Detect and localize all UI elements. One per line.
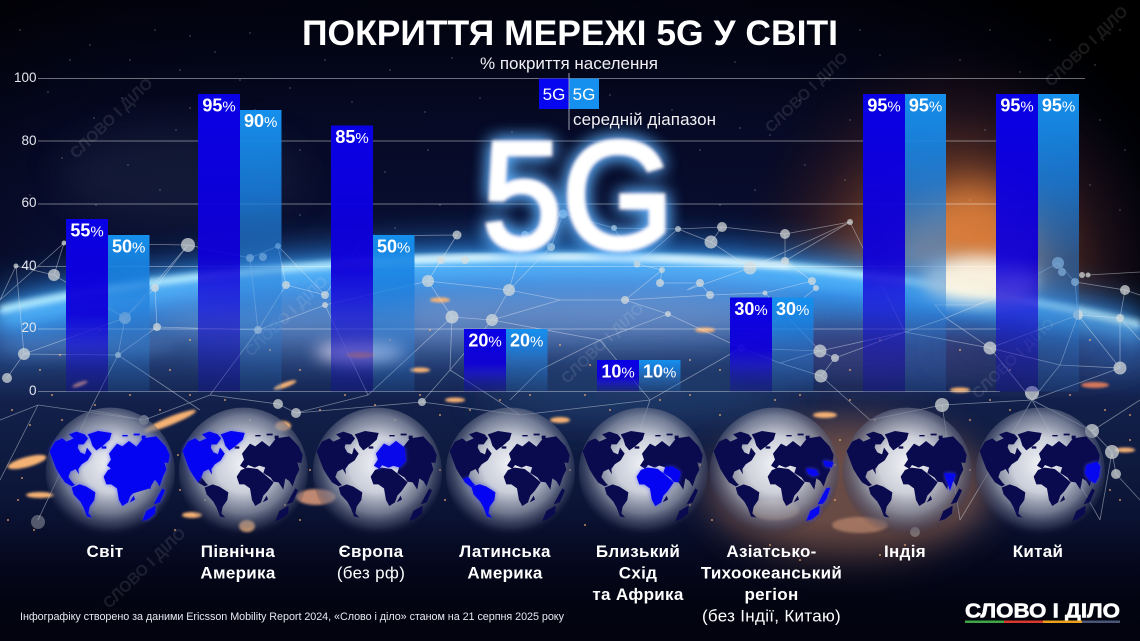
source note: Інфографіку створено за даними Ericsson Mobility Report 2024, «Слово і діло» станом на 21 серпня 2025 року: [20, 611, 565, 623]
bars: Індія: 95%: [867, 96, 901, 116]
globe: Північна Америка: [179, 408, 308, 537]
watermarks: СЛОВО І ДІЛО: [762, 49, 852, 136]
region labels: [87, 542, 1063, 626]
label: Азіатсько-Тихоокеанський регіон: регіон: [744, 585, 799, 604]
label: Близький Схід та Африка: Близький: [596, 542, 680, 561]
globe: Світ: [46, 408, 175, 537]
y axis labels: 100: [14, 70, 36, 85]
watermarks: СЛОВО І ДІЛО: [969, 315, 1059, 402]
label: Європа: (без рф): [337, 564, 405, 582]
globe: Індія: [843, 408, 972, 537]
bars: Азіатсько-Тихоокеанський регіон: [730, 298, 814, 392]
bars: Китай: 95%: [1042, 96, 1075, 116]
bar chart: [66, 94, 1079, 392]
bars: Азіатсько-Тихоокеанський регіон: 30%: [776, 299, 809, 319]
logo: СЛОВО І ДІЛО: [965, 600, 1120, 622]
bars: Європа: [331, 126, 414, 392]
bars: Латинська Америка: 20%: [510, 330, 543, 350]
label: Китай: Китай: [1013, 542, 1063, 561]
legend: 5G: [573, 85, 595, 104]
legend: 5G: [543, 85, 565, 104]
title: ПОКРИТТЯ МЕРЕЖІ 5G У СВІТІ: [302, 13, 838, 53]
background: network mesh: [0, 210, 1140, 537]
bars: Європа: 50%: [377, 236, 410, 256]
bars: Північна Америка: 95%: [202, 96, 236, 116]
bars: Північна Америка: 90%: [244, 111, 277, 131]
legend: середній діапазон: [573, 110, 716, 129]
globe: Китай: [976, 408, 1105, 537]
bars: Латинська Америка: 20%: [468, 330, 502, 350]
bars: Близький Схід та Африка: 10%: [601, 362, 635, 382]
y axis labels: 40: [21, 258, 36, 273]
bars: Індія: [863, 94, 946, 392]
bars: Китай: 95%: [1000, 96, 1034, 116]
watermarks: СЛОВО І ДІЛО: [558, 300, 648, 387]
label: Близький Схід та Африка: та Африка: [592, 585, 684, 604]
label: Близький Схід та Африка: Схід: [619, 564, 657, 582]
label: Латинська Америка: Латинська: [459, 542, 551, 561]
watermarks: СЛОВО І ДІЛО: [242, 273, 332, 360]
bars: Світ: 55%: [70, 220, 104, 240]
watermarks: СЛОВО І ДІЛО: [1042, 3, 1132, 90]
label: Європа: Європа: [339, 542, 403, 561]
globe: Латинська Америка: [446, 408, 575, 537]
label: Північна Америка: Америка: [200, 564, 276, 582]
bars: Індія: 95%: [909, 96, 942, 116]
bars: Близький Схід та Африка: [597, 360, 680, 392]
bars: Близький Схід та Африка: 10%: [643, 362, 676, 382]
bars: Європа: 85%: [335, 127, 369, 147]
bars: Світ: [66, 219, 150, 392]
bars: Азіатсько-Тихоокеанський регіон: 30%: [734, 299, 768, 319]
y axis labels: [14, 70, 36, 398]
bars: Латинська Америка: [464, 329, 548, 392]
label: Світ: Світ: [87, 542, 123, 561]
label: Індія: Індія: [884, 542, 926, 561]
watermarks: СЛОВО І ДІЛО: [67, 75, 157, 162]
y axis labels: 80: [21, 133, 36, 148]
label: Азіатсько-Тихоокеанський регіон: Тихоокеанський: [701, 564, 842, 582]
background: city lights: [6, 298, 1135, 560]
y axis labels: 60: [21, 195, 36, 210]
bars: Північна Америка: [198, 94, 282, 392]
bars: Світ: 50%: [112, 236, 145, 256]
globe: Близький Схід та Африка: [579, 408, 708, 537]
bars: Китай: [996, 94, 1079, 392]
label: Азіатсько-Тихоокеанський регіон: Азіатсько-: [726, 542, 817, 561]
subtitle: % покриття населення: [480, 54, 658, 73]
y axis labels: 20: [21, 320, 36, 335]
globe: Європа: [313, 408, 442, 537]
y axis labels: 0: [29, 383, 36, 398]
chart grid lines: [38, 78, 1085, 392]
globe: Азіатсько-Тихоокеанський регіон: [710, 408, 839, 537]
watermarks: СЛОВО І ДІЛО: [100, 525, 190, 612]
label: Азіатсько-Тихоокеанський регіон: (без Індії, Китаю): [702, 606, 841, 626]
label: Латинська Америка: Америка: [467, 564, 543, 582]
legend: [539, 73, 716, 130]
label: Північна Америка: Північна: [201, 542, 275, 561]
big glowing 5G: 5G: [482, 110, 674, 281]
background: planet earth: [0, 256, 1140, 641]
